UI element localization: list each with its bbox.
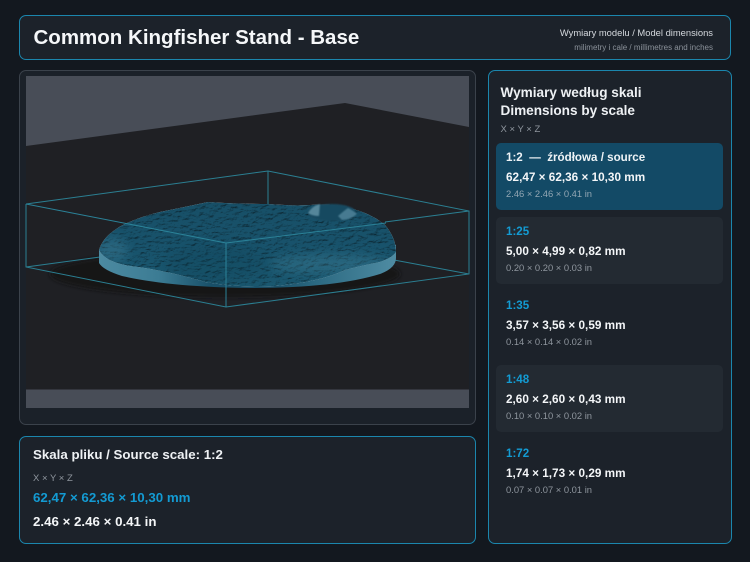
inches: 0.20 × 0.20 × 0.03 in bbox=[506, 262, 592, 273]
title: Common Kingfisher Stand - Base bbox=[34, 26, 359, 49]
card: scale 1:2 source bbox=[496, 143, 723, 210]
scale label: 1:2 — źródłowa / source bbox=[506, 150, 645, 164]
panel heading bbox=[500, 84, 642, 118]
3D render of base with bounding box bbox=[26, 76, 470, 408]
axis label: X × Y × Z bbox=[33, 473, 73, 484]
axis label: X × Y × Z bbox=[500, 124, 540, 135]
card: scale 1:72 bbox=[506, 446, 626, 495]
millimetres: 2,60 × 2,60 × 0,43 mm bbox=[506, 393, 626, 406]
bottom band bbox=[26, 390, 469, 408]
millimetres: 3,57 × 3,56 × 0,59 mm bbox=[506, 319, 626, 332]
millimetres: 5,00 × 4,99 × 0,82 mm bbox=[506, 245, 626, 258]
floor background bbox=[26, 76, 469, 408]
inches: 0.14 × 0.14 × 0.02 in bbox=[506, 336, 592, 347]
scale label: 1:25 bbox=[506, 224, 529, 238]
bounding box back edges bbox=[26, 171, 469, 307]
back wall band bbox=[26, 76, 469, 146]
millimetres: 1,74 × 1,73 × 0,29 mm bbox=[506, 467, 626, 480]
panel: source scale bbox=[19, 436, 476, 544]
bounding box front edges bbox=[26, 204, 386, 307]
model surface shading bbox=[100, 238, 383, 280]
model crater bbox=[308, 204, 357, 221]
source dimensions in millimetres: 62,47 × 62,36 × 10,30 mm bbox=[33, 490, 190, 504]
source dimensions in inches: 2.46 × 2.46 × 0.41 in bbox=[33, 514, 156, 529]
panel: model preview bbox=[19, 70, 476, 424]
card: scale 1:25 bbox=[496, 217, 723, 284]
card: scale 1:35 bbox=[506, 298, 626, 347]
header panel bbox=[19, 15, 731, 60]
header note: milimetry i cale / millimetres and inches bbox=[574, 42, 713, 52]
inches: 2.46 × 2.46 × 0.41 in bbox=[506, 188, 592, 199]
model side wall bbox=[99, 245, 396, 288]
ground shadow bbox=[50, 251, 400, 297]
panel heading: Wymiary według skali bbox=[500, 84, 642, 100]
panel: dimensions by scale bbox=[488, 70, 732, 544]
scale label: 1:72 bbox=[506, 446, 529, 460]
scale label: 1:35 bbox=[506, 298, 529, 312]
inches: 0.07 × 0.07 × 0.01 in bbox=[506, 484, 592, 495]
millimetres: 62,47 × 62,36 × 10,30 mm bbox=[506, 171, 645, 184]
panel heading: Dimensions by scale bbox=[500, 102, 635, 118]
model base bbox=[96, 202, 396, 288]
model top surface bbox=[99, 202, 396, 286]
card: scale 1:48 bbox=[496, 365, 723, 432]
source scale heading: Skala pliku / Source scale: 1:2 bbox=[33, 447, 223, 462]
scale label: 1:48 bbox=[506, 372, 529, 386]
header subtitle: Wymiary modelu / Model dimensions bbox=[560, 27, 713, 38]
inches: 0.10 × 0.10 × 0.02 in bbox=[506, 410, 592, 421]
